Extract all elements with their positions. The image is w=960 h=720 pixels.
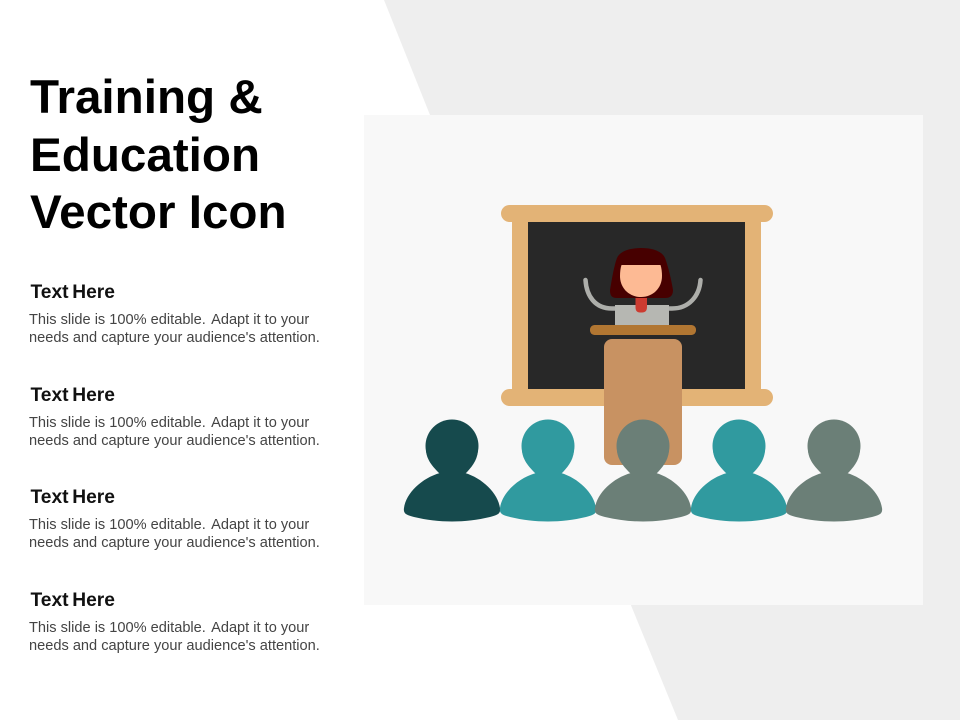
text block 3 — [29, 487, 320, 551]
person 4 — [691, 420, 787, 522]
person 2 — [500, 420, 596, 522]
arms — [586, 280, 700, 308]
face — [620, 265, 662, 297]
text block 4: needs and capture your audience's attention. — [29, 638, 320, 654]
text block 3: Text Here — [30, 487, 115, 508]
title: Training & — [30, 71, 263, 124]
text block 2: Text Here — [30, 385, 115, 406]
text block 4: Text Here — [30, 590, 115, 611]
text block 4 — [29, 590, 320, 654]
title: Education — [30, 128, 260, 182]
torso — [615, 305, 669, 327]
background shape — [384, 0, 960, 720]
person 5 — [786, 420, 882, 522]
person 3 — [595, 420, 691, 522]
text block 1 — [29, 282, 320, 346]
text block 1: Text Here — [30, 282, 115, 303]
text block 2 — [29, 385, 320, 449]
text block 1: needs and capture your audience's attention. — [29, 330, 320, 346]
text block 4: This slide is 100% editable. Adapt it to your — [29, 620, 309, 636]
icon: audience — [404, 420, 882, 522]
text block 3: This slide is 100% editable. Adapt it to your — [29, 517, 309, 533]
tie — [636, 298, 647, 312]
hair — [610, 248, 673, 298]
title — [30, 71, 287, 239]
icon: blackboard — [501, 205, 773, 406]
icon: teacher — [586, 248, 700, 327]
text block 3: needs and capture your audience's attention. — [29, 535, 320, 551]
title: Vector Icon — [30, 186, 287, 239]
person 1 — [404, 420, 500, 522]
text block 2: This slide is 100% editable. Adapt it to your — [29, 415, 309, 431]
panel: illustration background — [364, 115, 923, 605]
text block 1: This slide is 100% editable. Adapt it to your — [29, 312, 309, 328]
icon: podium — [590, 325, 696, 465]
text block 2: needs and capture your audience's attention. — [29, 433, 320, 449]
